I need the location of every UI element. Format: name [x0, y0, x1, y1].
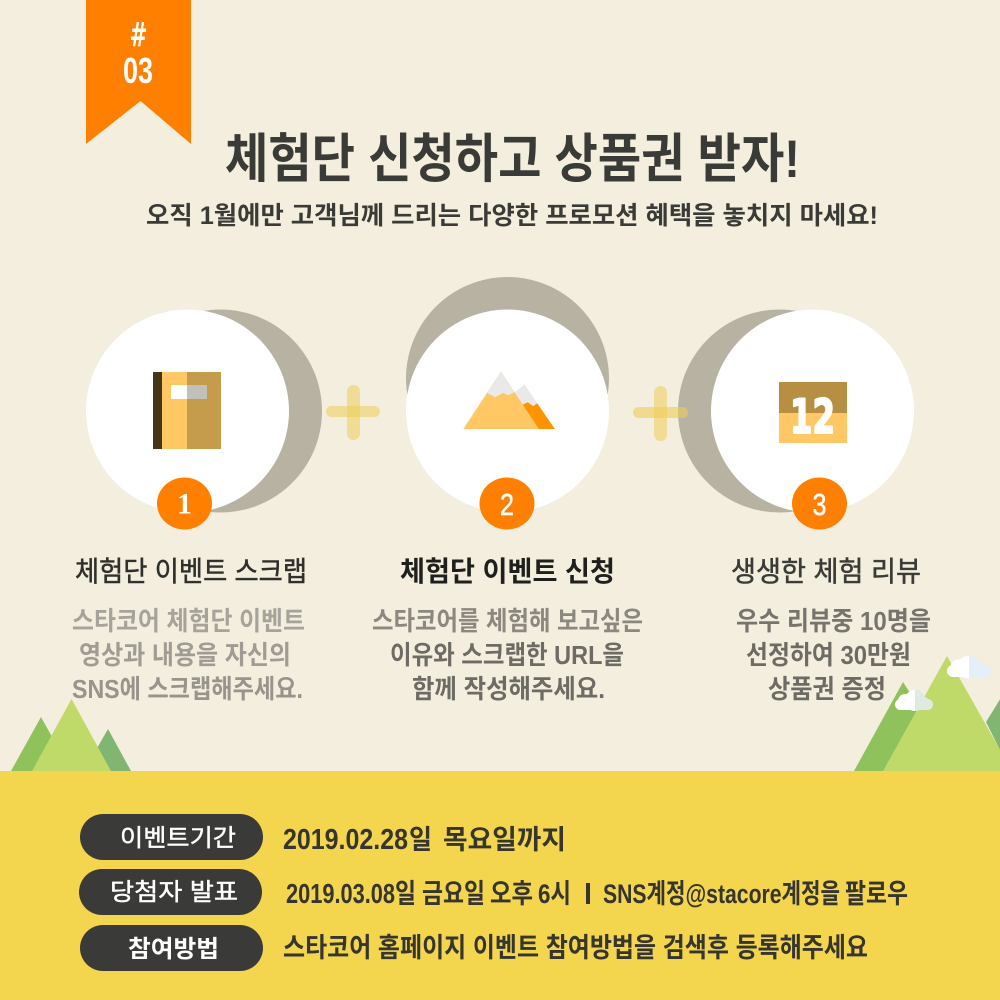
badge 2	[480, 478, 534, 530]
plus 2	[633, 386, 688, 441]
step 3 text: 선정하여 30만원	[746, 640, 911, 670]
how to join text: 스타코어 홈페이지 이벤트 참여방법을 검색후 등록해주세요	[283, 933, 868, 963]
badge 1	[157, 478, 212, 530]
step 1 text: 체험단 이벤트 스크랩	[75, 556, 307, 587]
pill: how to join: 참여방법	[128, 936, 219, 963]
step 3 text: 생생한 체험 리뷰	[731, 556, 921, 587]
pill: event period	[80, 814, 263, 860]
badge 3: 3	[812, 487, 826, 522]
ribbon: #03: 03	[123, 50, 153, 91]
icon: calendar: 12	[790, 390, 835, 445]
ribbon: #03: #	[130, 16, 148, 56]
step 3 circle	[678, 310, 914, 530]
plus 1	[326, 385, 380, 440]
step 2 text	[372, 556, 643, 704]
winner announcement text: 오후	[490, 879, 533, 909]
step 2 text: 함께 작성해주세요.	[412, 674, 605, 704]
winner announcement text: 금요일	[422, 879, 485, 909]
event period text: 2019.02.28	[283, 824, 408, 856]
icon: notebook	[153, 372, 221, 449]
icon: mountains	[463, 372, 555, 429]
step 1 text: 영상과 내용을 자신의	[79, 640, 291, 670]
cloud large	[947, 656, 991, 678]
winner announcement text: 6시	[538, 879, 571, 909]
winner announcement text: 일	[395, 879, 416, 909]
badge 2: 2	[500, 487, 514, 522]
hills right	[854, 656, 1000, 771]
pill: winner announcement	[79, 869, 262, 915]
subtitle: 오직 1월에만 고객님께 드리는 다양한 프로모션 혜택을 놓치지 마세요!	[146, 202, 878, 230]
badge 1: 1	[177, 488, 192, 520]
pill: event period: 이벤트기간	[120, 825, 236, 852]
title: 체험단 신청하고 상품권 받자!	[225, 130, 800, 189]
step 2 circle	[406, 277, 609, 530]
step 1 text: SNS에 스크랩해주세요.	[72, 674, 303, 704]
event period text: 일	[409, 825, 432, 855]
step 3 text: 우수 리뷰중 10명을	[736, 606, 931, 636]
step 2 text: 체험단 이벤트 신청	[400, 556, 615, 587]
step 1 text: 스타코어 체험단 이벤트	[72, 606, 305, 636]
hills left	[11, 699, 131, 771]
winner announcement text: 팔로우	[845, 879, 908, 909]
cloud small	[895, 690, 933, 711]
winner announcement text	[286, 878, 908, 909]
step 1 text	[72, 556, 307, 704]
icon: calendar	[779, 382, 847, 445]
step 3 text: 상품권 증정	[768, 674, 886, 704]
ribbon: #03	[86, 0, 191, 144]
event period text: 목요일까지	[443, 825, 566, 855]
event period text	[283, 824, 566, 856]
winner announcement text: 2019.03.08	[286, 878, 395, 909]
step 1 circle	[86, 310, 322, 530]
yellow footer band	[0, 771, 1000, 1000]
step 3 text	[731, 556, 931, 704]
pill: winner announcement: 당첨자 발표	[110, 879, 238, 906]
winner announcement text: SNS계정@stacore계정을	[603, 879, 840, 909]
badge 3	[792, 478, 847, 530]
pill: how to join	[80, 925, 263, 971]
step 2 text: 스타코어를 체험해 보고싶은	[372, 606, 643, 636]
step 2 text: 이유와 스크랩한 URL을	[390, 640, 624, 670]
